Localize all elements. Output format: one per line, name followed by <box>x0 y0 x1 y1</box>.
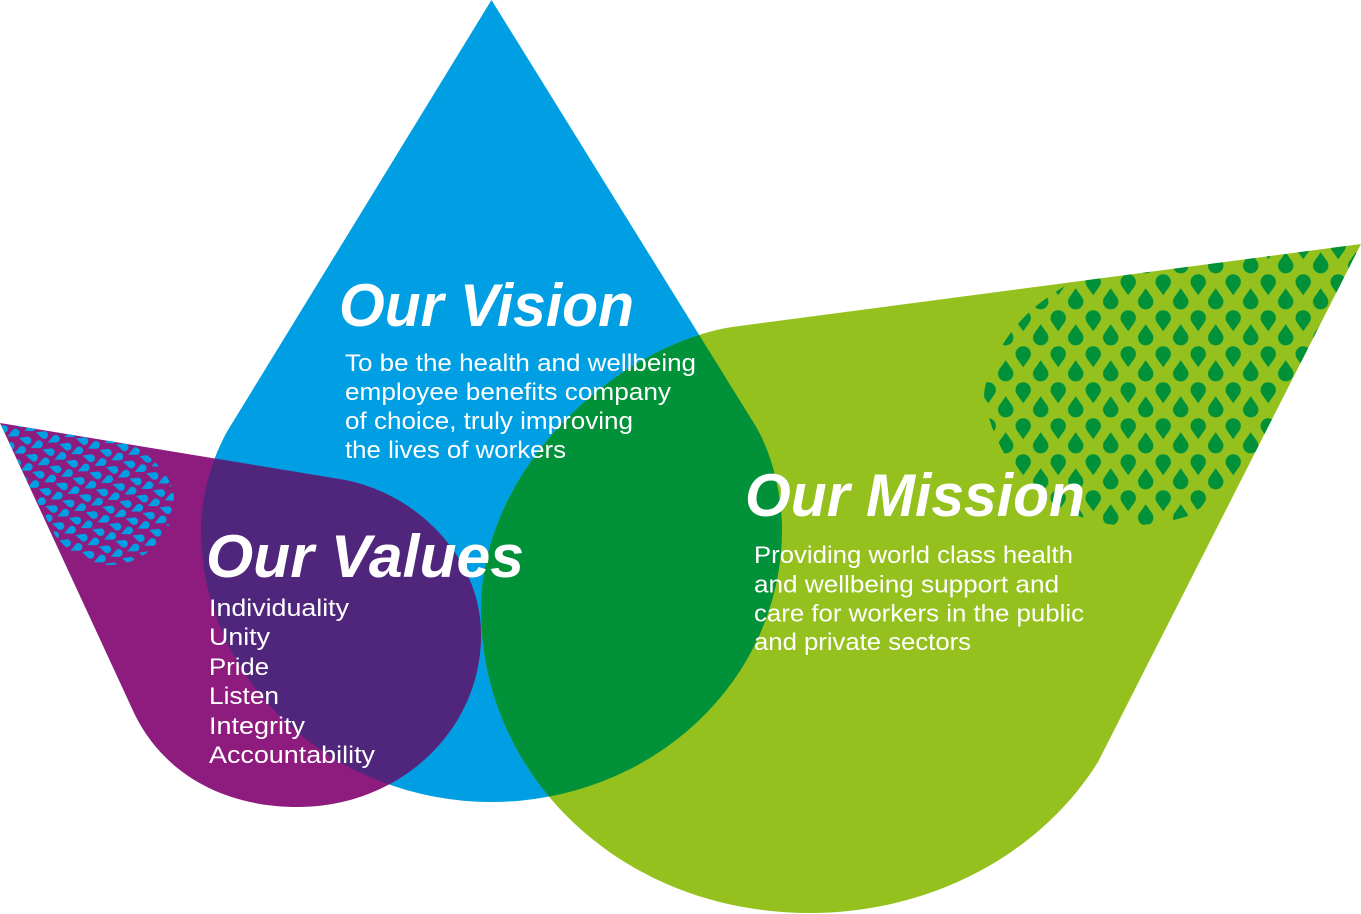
overlap: vision and values <box>201 458 481 784</box>
heading: our mission: Our Mission <box>745 462 1085 529</box>
text block: values list: Pride <box>209 654 269 681</box>
text block: mission statement: care for workers in the public <box>754 600 1084 628</box>
text block: values list <box>209 595 376 769</box>
panel: our values purple drop <box>0 423 481 807</box>
heading: our vision: Our Vision <box>339 272 634 339</box>
text block: values list: Accountability <box>209 742 376 769</box>
panel: our vision blue drop <box>201 0 782 802</box>
panel: our mission green drop <box>481 230 1361 913</box>
text block: vision statement: of choice, truly improving <box>345 408 633 435</box>
heading: our values: Our Values <box>206 523 524 590</box>
text block: vision statement: employee benefits company <box>345 379 672 406</box>
text block: mission statement: and wellbeing support and <box>754 572 1059 598</box>
overlap: vision and mission <box>481 335 782 796</box>
text block: mission statement: Providing world class health <box>754 542 1073 569</box>
text block: vision statement <box>345 350 696 464</box>
text block: vision statement: the lives of workers <box>345 437 566 464</box>
text block: mission statement <box>754 542 1084 656</box>
green drop pattern <box>984 246 1356 525</box>
text block: values list: Integrity <box>209 713 306 740</box>
purple drop pattern <box>1 425 174 565</box>
text block: vision statement: To be the health and wellbeing <box>345 350 696 377</box>
text block: values list: Individuality <box>209 595 350 622</box>
text block: values list: Unity <box>209 624 271 651</box>
text block: mission statement: and private sectors <box>754 629 971 656</box>
text block: values list: Listen <box>209 683 279 710</box>
